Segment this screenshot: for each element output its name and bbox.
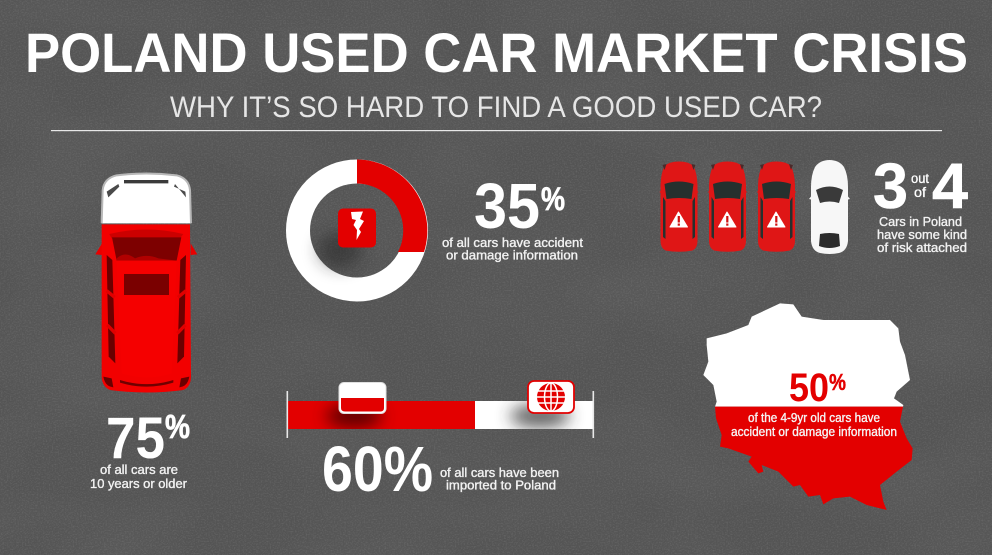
stat: 3 out of 4: of — [914, 185, 926, 200]
donut chart — [298, 160, 427, 290]
stat: 35%: 35 — [474, 170, 540, 242]
panel: 60% imported bar — [286, 381, 594, 505]
stat: 60%: 60% — [322, 433, 433, 505]
caption: 60%: of all cars have been — [440, 466, 559, 480]
stat: 3 out of 4: out — [911, 171, 929, 186]
caption: 50% — [731, 411, 897, 439]
map of Poland — [703, 303, 913, 510]
icon: red car 2 — [708, 162, 747, 252]
icon: red car 1 — [660, 162, 698, 252]
caption: 35% — [442, 236, 584, 262]
caption: 3 out of 4: have some kind — [877, 228, 967, 242]
caption: 75%: 10 years or older — [90, 477, 187, 491]
stat: 3 out of 4: 3 — [873, 150, 908, 222]
caption: 60% — [440, 466, 559, 492]
stat: 50%: 50 — [789, 366, 829, 410]
caption: 3 out of 4 — [877, 215, 967, 255]
caption: 75% — [90, 463, 187, 491]
icon: globe — [528, 381, 574, 413]
icon: crack — [338, 208, 376, 248]
panel: 35% accident donut — [298, 160, 584, 290]
caption: 35%: of all cars have accident — [442, 236, 584, 250]
icon: large car top view filled 75 percent red — [95, 173, 197, 392]
caption: 75%: of all cars are — [100, 463, 178, 477]
panel: 50% Poland map — [703, 303, 913, 510]
stat: 50%: % — [829, 369, 846, 395]
caption: 50%: of the 4-9yr old cars have — [748, 411, 880, 425]
caption: 35%: or damage information — [446, 248, 578, 262]
panel: 3 out of 4 cars — [660, 150, 968, 255]
caption: 3 out of 4: of risk attached — [877, 241, 967, 255]
stat: 3 out of 4 — [873, 150, 968, 222]
subtitle: WHY IT’S SO HARD TO FIND A GOOD USED CAR? — [170, 91, 822, 124]
bar chart — [286, 391, 594, 438]
panel: 75% older cars — [90, 173, 197, 491]
stat: 75%: % — [165, 408, 190, 445]
icon: red car 3 — [757, 162, 796, 252]
icon: Polish flag — [339, 382, 386, 414]
stat: 3 out of 4: 4 — [932, 150, 968, 222]
stat: 75%: 75 — [106, 406, 165, 471]
stat: 35%: % — [541, 181, 565, 217]
caption: 3 out of 4: Cars in Poland — [879, 215, 962, 229]
caption: 50%: accident or damage information — [731, 425, 897, 439]
caption: 60%: imported to Poland — [446, 478, 556, 492]
icon: white car — [809, 160, 850, 254]
